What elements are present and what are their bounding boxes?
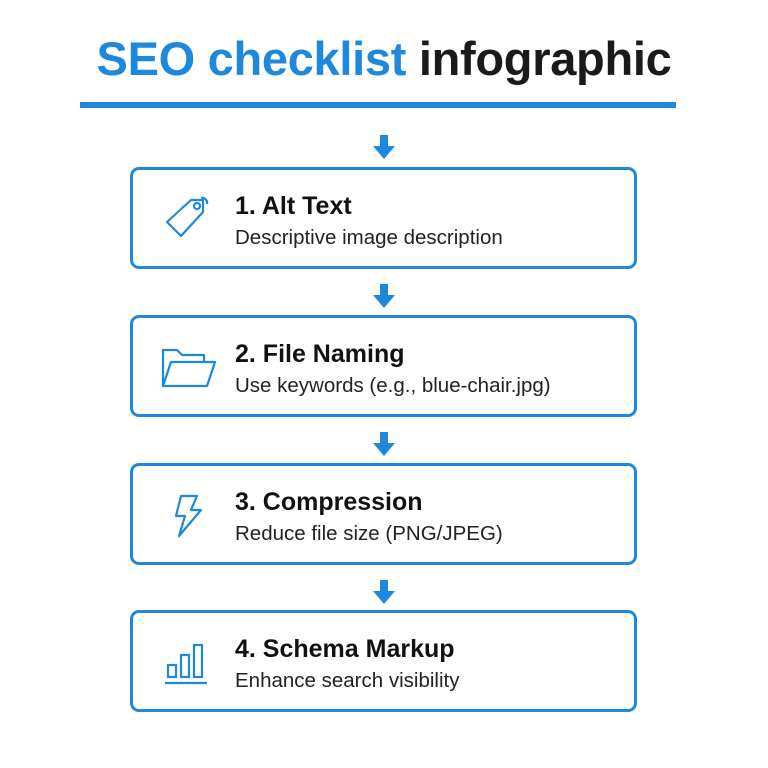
title: SEO checklist infographic — [97, 32, 671, 85]
arrow 1 — [373, 135, 395, 159]
panel: file naming — [130, 315, 637, 417]
icon: folder — [162, 348, 216, 388]
icon: tag — [166, 196, 208, 238]
arrow 4 — [373, 580, 395, 604]
panel: compression — [130, 463, 637, 565]
text: Use keywords (e.g., blue-chair.jpg) — [235, 374, 551, 397]
heading: 1. Alt Text — [235, 192, 352, 220]
text: Enhance search visibility — [235, 669, 459, 692]
text: Descriptive image description — [235, 226, 503, 249]
heading: 2. File Naming — [235, 340, 404, 368]
icon: lightning — [174, 494, 202, 538]
heading: 4. Schema Markup — [235, 635, 455, 663]
panel: alt text — [130, 167, 637, 269]
panel: schema markup — [130, 610, 637, 712]
arrow 3 — [373, 432, 395, 456]
arrow 2 — [373, 284, 395, 308]
icon: bar chart — [165, 644, 207, 684]
text: Reduce file size (PNG/JPEG) — [235, 522, 503, 545]
heading: 3. Compression — [235, 488, 423, 516]
